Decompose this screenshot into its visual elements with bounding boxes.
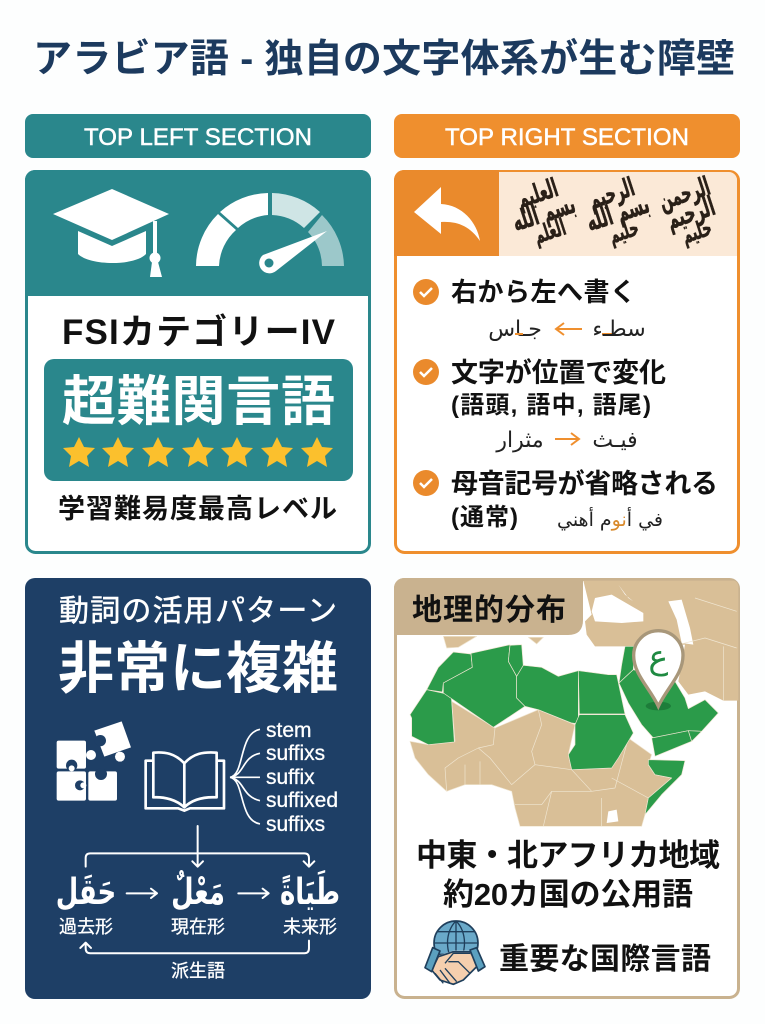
icon: graduation cap [53, 189, 169, 277]
icon: open book [146, 752, 224, 811]
item: letters change by position: مثرار [495, 428, 544, 453]
heading: top left section: TOP LEFT SECTION [84, 124, 312, 151]
text: Middle East and North Africa: 中東・北アフリカ地域 [416, 838, 720, 873]
tab: geographic distribution: 地理的分布 [412, 594, 566, 627]
word list: stem and suffixes [266, 719, 338, 836]
panel: difficulty [25, 170, 371, 552]
item: vowel marks omitted [413, 468, 718, 531]
icon: calligraphy medallions: الرحيم [663, 191, 719, 236]
tense labels: 派生語 [171, 961, 225, 981]
word list: stem and suffixes: suffix [266, 766, 315, 789]
word list: stem and suffixes: suffixed [266, 789, 338, 812]
text: important international language: 重要な国際言語 [499, 943, 711, 976]
fan of connector lines [230, 729, 260, 824]
icon: calligraphy medallions: العليم [513, 172, 562, 214]
item: right to left: جـاس [488, 317, 542, 342]
callout: extremely difficult language: 超難関言語 [62, 372, 335, 432]
text: FSI category: FSIカテゴリーIV [62, 312, 336, 352]
icon: globe and handshake [425, 921, 485, 984]
icon: calligraphy medallions: الرحيم [584, 171, 638, 215]
word list: stem and suffixes: stem [266, 719, 312, 742]
item: vowel marks omitted: 母音記号が省略される [451, 468, 718, 499]
word list: stem and suffixes: suffixs [266, 742, 325, 765]
panel: writing system [394, 168, 738, 553]
icon: calligraphy medallions: حليم [678, 214, 715, 249]
panel: geographic distribution [394, 578, 738, 998]
panel: verb conjugation [25, 578, 371, 999]
map: Arab world [410, 581, 738, 826]
tense labels: 過去形 [59, 917, 113, 937]
icon: speedometer gauge [196, 193, 344, 273]
title: アラビア語 - 独自の文字体系が生む障壁 [33, 38, 735, 81]
callout: extremely difficult language [44, 359, 353, 481]
icon: right to left arrow [414, 187, 480, 241]
item: letters change by position: فيـث [592, 428, 638, 453]
arabic verb forms: طَيَاةً [280, 870, 340, 913]
icon: seven stars [63, 437, 333, 467]
icon: calligraphy medallions: الرحمن [654, 170, 714, 216]
heading: top right section: TOP RIGHT SECTION [445, 124, 689, 151]
tab: geographic distribution [394, 578, 583, 635]
item: right to left [413, 277, 646, 342]
item: vowel marks omitted: في أنوم أهني [557, 507, 663, 531]
text: highest difficulty level: 学習難易度最高レベル [58, 494, 337, 524]
icon: location pin [634, 631, 683, 710]
item: right to left: 右から左へ書く [451, 277, 636, 307]
item: vowel marks omitted: (通常) [451, 504, 518, 531]
icon: calligraphy medallions: حليم [605, 214, 642, 249]
icon: location pin: ع [648, 638, 668, 677]
icon: calligraphy medallions: بسم الله [509, 189, 579, 238]
text: verb conjugation pattern: 動詞の活用パターン [59, 595, 337, 628]
icon: calligraphy medallions [502, 168, 726, 255]
tense labels [59, 917, 337, 981]
heading: top right section [394, 114, 740, 158]
icon: calligraphy medallions: العلم [530, 214, 569, 250]
icon: puzzle pieces [57, 721, 131, 801]
icon: calligraphy medallions: بسم الله [583, 189, 653, 238]
item: letters change by position [413, 357, 666, 453]
diagram arrows [80, 826, 314, 953]
item: right to left: سطـء [592, 317, 646, 342]
tense labels: 現在形 [171, 917, 225, 937]
text: very complex: 非常に複雑 [58, 637, 338, 700]
text: official language of about 20 countries: 約20カ国の公用語 [443, 877, 693, 912]
arabic verb forms: حَقَل [56, 872, 116, 913]
arabic verb forms: مَعْلٌ [171, 870, 225, 913]
arabic verb forms [56, 870, 340, 913]
word list: stem and suffixes: suffixs [266, 813, 325, 836]
tense labels: 未来形 [283, 917, 337, 937]
item: letters change by position: (語頭, 語中, 語尾) [451, 392, 651, 419]
item: letters change by position: 文字が位置で変化 [451, 357, 666, 388]
heading: top left section [25, 114, 371, 158]
